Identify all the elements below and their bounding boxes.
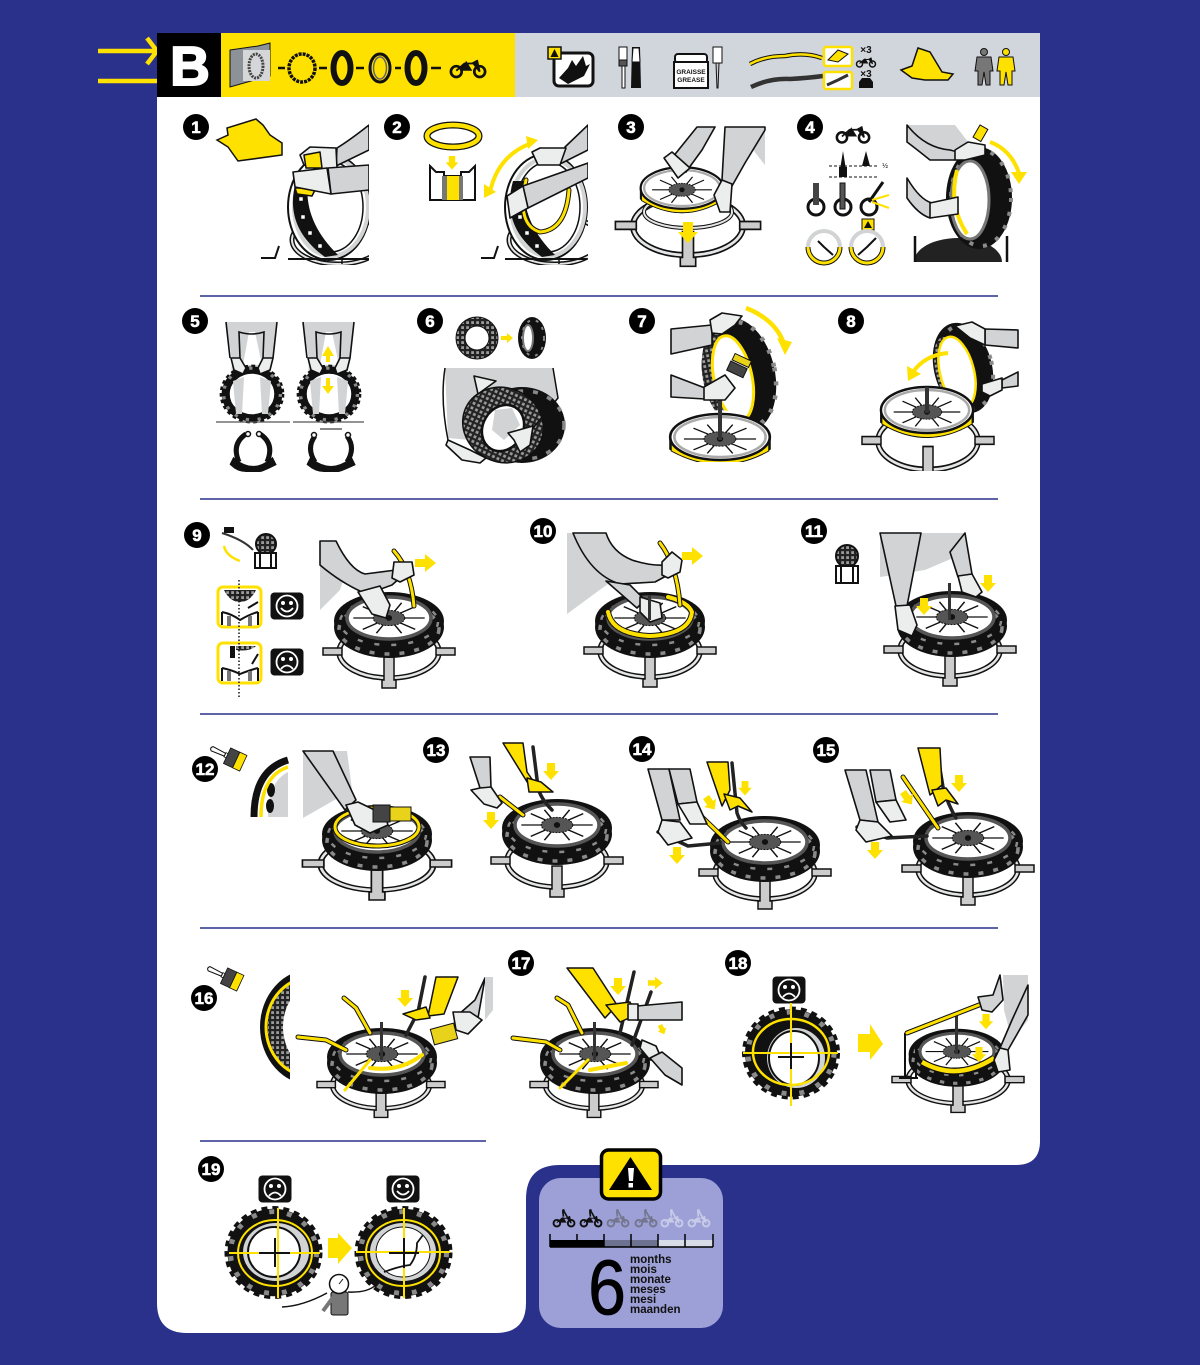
step 1 [183, 114, 384, 264]
step number [417, 308, 443, 334]
rim placed on stand [615, 127, 765, 266]
yellow sequence strip [221, 33, 515, 97]
icon: rim tape [427, 125, 479, 147]
tyre with levers and hands [513, 968, 682, 1117]
time scale [550, 1234, 713, 1247]
section dividers [200, 296, 998, 1141]
step 16 [191, 960, 493, 1117]
step 2 [384, 114, 601, 264]
curved arrow [484, 136, 538, 198]
icon: tyre levers [750, 47, 852, 89]
step 18 [725, 950, 1028, 1112]
step 14 [629, 736, 831, 909]
step number: 15 [817, 741, 835, 760]
header bar [98, 33, 1040, 97]
levers and tyre [845, 748, 1034, 905]
tyre on stand with lever [320, 541, 455, 688]
step 11 [801, 518, 1016, 686]
months label: mesi [630, 1294, 656, 1306]
step number: 8 [846, 312, 856, 331]
step 3 [615, 114, 765, 266]
letter B block [157, 33, 221, 97]
small arrow [501, 333, 513, 343]
letter B block: B [170, 35, 210, 97]
months label: months [630, 1254, 672, 1266]
mousse ring [460, 322, 494, 354]
step number [725, 950, 751, 976]
icon: gloved hand warning [548, 47, 593, 86]
step number [182, 308, 208, 334]
step number [629, 736, 655, 762]
sad face [270, 648, 304, 676]
step 9 [184, 522, 455, 697]
small tyre [518, 317, 546, 359]
panel background [539, 1178, 723, 1328]
step number [384, 114, 410, 140]
icon: bike [837, 126, 869, 142]
icon: cloth [901, 48, 953, 80]
step number: 11 [805, 522, 823, 541]
icon: two people [975, 48, 1015, 85]
months label: meses [630, 1284, 666, 1296]
arrow [858, 1024, 883, 1060]
icon: grease jar: GREASE [677, 77, 705, 84]
lever diagram [222, 527, 276, 568]
multiplier x3 [856, 45, 876, 88]
tyre over rim on stand [862, 316, 1018, 481]
six-month warning panel [539, 1150, 723, 1331]
rim section [430, 166, 475, 200]
grey tools strip [515, 33, 1040, 97]
upright tyre and brush [670, 308, 792, 465]
step number [838, 308, 864, 334]
step number: 14 [633, 740, 652, 759]
step number [530, 518, 556, 544]
step number [423, 737, 449, 763]
levers and tyre [648, 762, 831, 909]
tyre segment with mesh [260, 974, 290, 1080]
icon: brush [204, 960, 244, 991]
happy face [386, 1176, 420, 1202]
step number: 16 [195, 989, 213, 1008]
step 15 [813, 737, 1034, 905]
warning mark [862, 219, 874, 230]
valve heights [829, 151, 888, 177]
tyre centred [356, 1208, 450, 1298]
tyre section pinched [232, 432, 274, 470]
step 19 [198, 1156, 450, 1315]
tyre section spread [309, 429, 353, 470]
step number: 2 [392, 118, 402, 137]
step number [198, 1156, 224, 1182]
tyre on bead breaker [892, 975, 1028, 1112]
dotted centre line [238, 580, 240, 697]
step number: 3 [626, 118, 636, 137]
step number: 5 [190, 312, 200, 331]
months label: maanden [630, 1304, 680, 1316]
step number [191, 985, 217, 1011]
white instruction panel [157, 97, 1040, 1333]
rim with yellow strip and hands [481, 125, 601, 264]
tyre off centre [743, 1003, 838, 1106]
step number: 18 [729, 954, 747, 973]
tyre on stand with brush [302, 751, 452, 900]
number six: 6 [588, 1245, 626, 1331]
step 4 [797, 114, 1027, 266]
step 5 [182, 308, 364, 470]
step number [813, 737, 839, 763]
step 10 [530, 518, 716, 687]
tyre bead segment [254, 760, 288, 817]
step number [192, 756, 218, 782]
icon: brush and tube [619, 47, 641, 88]
icons: valve fitting [808, 182, 889, 215]
step number [801, 518, 827, 544]
step 7 [629, 308, 792, 465]
step number: 9 [192, 526, 202, 545]
motorcycles row [554, 1209, 709, 1226]
step number: 10 [534, 522, 552, 541]
step number [629, 308, 655, 334]
multiplier x3: ×3 [860, 45, 872, 56]
step number [508, 950, 534, 976]
upright tyre with hands [906, 124, 1027, 262]
step number: 7 [637, 312, 647, 331]
step 12 [192, 740, 452, 900]
icon: cloth [217, 119, 282, 161]
compressed tyre [221, 322, 283, 422]
correct position detail [218, 587, 261, 627]
step number [183, 114, 209, 140]
step 13 [423, 737, 623, 897]
mousse clamp icon [836, 545, 858, 583]
months label [630, 1254, 680, 1316]
icon: grease jar: GRAISSE [676, 69, 706, 76]
happy face [270, 592, 304, 620]
sad face [772, 976, 806, 1004]
step 17 [508, 950, 682, 1117]
step number: 19 [202, 1160, 220, 1179]
step number: 1 [191, 118, 201, 137]
icon: brush [207, 740, 247, 771]
rim on stand with hands [261, 124, 369, 265]
step number [797, 114, 823, 140]
step number: 13 [427, 741, 445, 760]
step number [618, 114, 644, 140]
mousse fitted into tyre [443, 368, 565, 476]
tyre on stand with yellow rim line [567, 533, 716, 687]
step number: 12 [196, 760, 214, 779]
months label: monate [630, 1274, 671, 1286]
pressing tyre on stand [880, 533, 1016, 686]
tyre off centre [226, 1208, 320, 1298]
step number: 6 [425, 312, 435, 331]
step 8 [838, 308, 1018, 481]
step number [184, 522, 210, 548]
warning badge [602, 1150, 660, 1199]
yellow double arrows [98, 38, 158, 81]
tyre with levers and brush [298, 977, 493, 1117]
icon: grease jar [674, 47, 722, 88]
step 6 [417, 308, 565, 476]
widened tyre [298, 322, 360, 422]
step number: 17 [512, 954, 530, 973]
gauges [808, 231, 883, 263]
arrow down [446, 156, 458, 170]
wrong position detail [218, 643, 261, 683]
levers with hands [470, 743, 623, 897]
valve heights: ½ [882, 162, 888, 170]
arrow [328, 1233, 352, 1264]
step number: 4 [805, 118, 815, 137]
multiplier x3: ×3 [860, 69, 872, 80]
divider lines [216, 421, 364, 423]
pressure gauge with hose [282, 1274, 376, 1315]
months label: mois [630, 1264, 657, 1276]
sad face [258, 1176, 292, 1202]
